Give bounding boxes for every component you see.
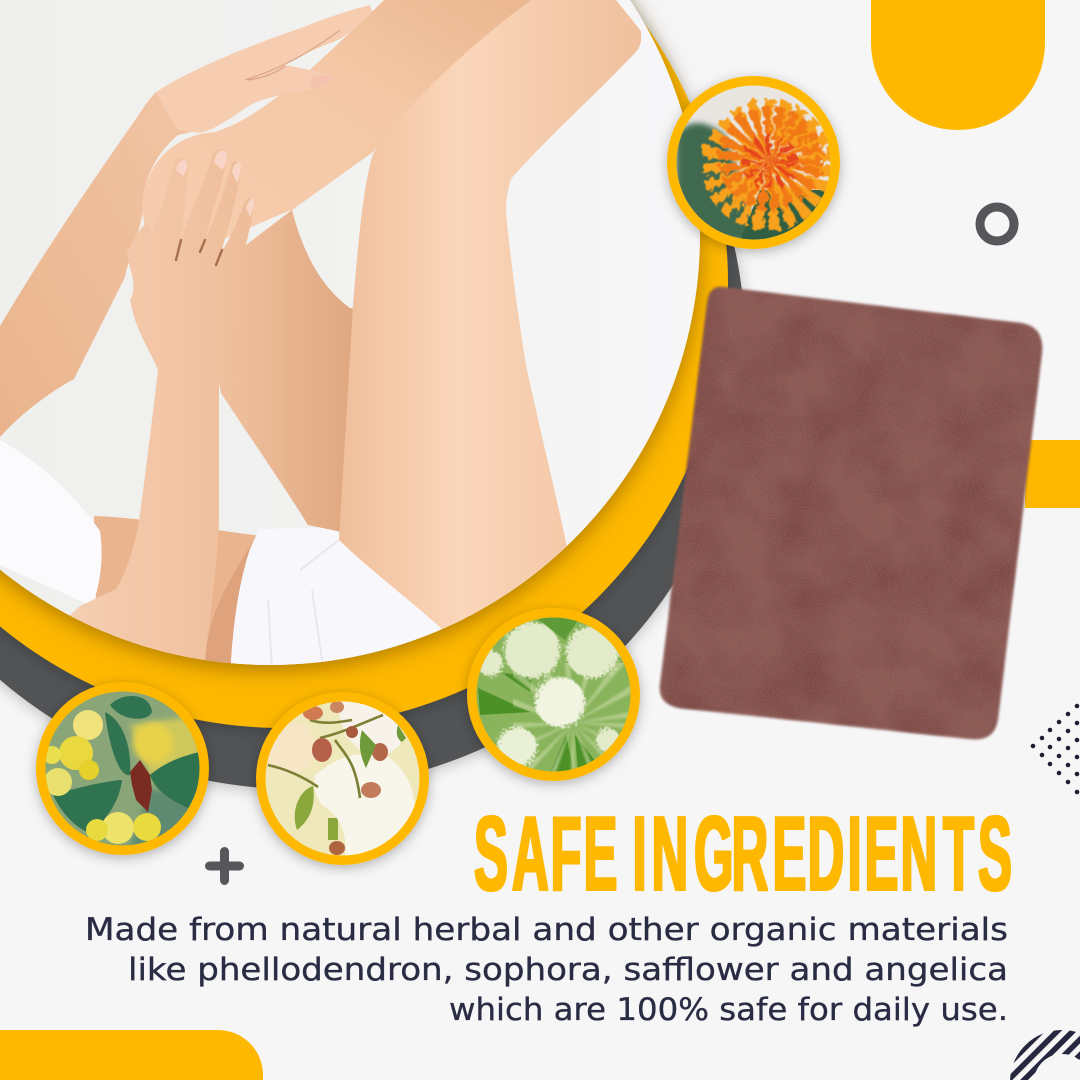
description text: Made from natural herbal and other organic materials: [85, 912, 1008, 948]
brown buds: [312, 738, 332, 762]
forearm and lower hand: [60, 149, 254, 680]
decoration: dot grid: [1033, 706, 1077, 792]
white shirt: [0, 440, 102, 606]
photo background: [0, 0, 710, 680]
herb circle: safflower: [667, 76, 840, 249]
white shorts: [230, 528, 442, 665]
green leaves: [295, 786, 314, 830]
decoration: bottom left yellow bar: [0, 1030, 263, 1080]
finger lines: [245, 30, 340, 80]
finger gaps: [176, 240, 222, 265]
fabric patch: [660, 287, 1042, 739]
top hand: [156, 5, 372, 133]
barberry background: [45, 691, 201, 847]
orange petals: [735, 127, 801, 198]
leaves: [53, 696, 200, 832]
decoration: yellow right block: [1025, 440, 1080, 508]
description text: like phellodendron, sophora, safflower and angelica: [128, 952, 1008, 988]
decoration: plus sign: [210, 852, 240, 880]
warm blurred petal: [264, 722, 316, 774]
stems: [268, 715, 383, 798]
torso skin: [90, 516, 256, 664]
sophora background: [265, 701, 421, 857]
decoration: striped ring: [1022, 1042, 1080, 1080]
rear thigh: [219, 210, 353, 532]
photo: woman's legs in circle: [0, 0, 710, 680]
yellow arc behind photo: [0, 0, 728, 728]
herb circle: barberry: [36, 682, 209, 855]
top hand finger nail: [310, 76, 332, 89]
decoration: grey ring: [980, 207, 1014, 241]
herb circle: angelica: [467, 608, 640, 781]
dark leaves: [676, 123, 760, 241]
description text: which are 100% safe for daily use.: [449, 992, 1008, 1028]
diagonal leg: [142, 0, 535, 251]
finger nails: [176, 150, 254, 217]
decoration: top right yellow tab: [871, 0, 1045, 130]
small leaves: [360, 725, 406, 768]
description text: [85, 912, 1008, 1028]
radial light rays: [523, 673, 623, 773]
white petals: [314, 754, 415, 858]
shorts folds: [268, 540, 339, 670]
yellow blossoms: [73, 710, 103, 740]
heading: safe ingredients: SAFE INGREDIENTS: [474, 794, 1012, 913]
blurred yellow: [130, 715, 200, 775]
lower right stem shadow: [741, 190, 826, 240]
grey arc behind photo: [0, 0, 745, 789]
safflower background: [676, 85, 832, 241]
torso shadow near waist: [205, 540, 254, 670]
front thigh: [339, 0, 641, 629]
herb circle: sophora: [256, 692, 429, 865]
white flower clusters: [477, 622, 620, 767]
brown bud: [130, 760, 152, 812]
angelica background: [476, 617, 632, 773]
top dark green: [535, 617, 580, 640]
left upper arm: [0, 92, 200, 437]
dark green wedges: [478, 673, 596, 772]
lower right muted green: [130, 790, 200, 847]
